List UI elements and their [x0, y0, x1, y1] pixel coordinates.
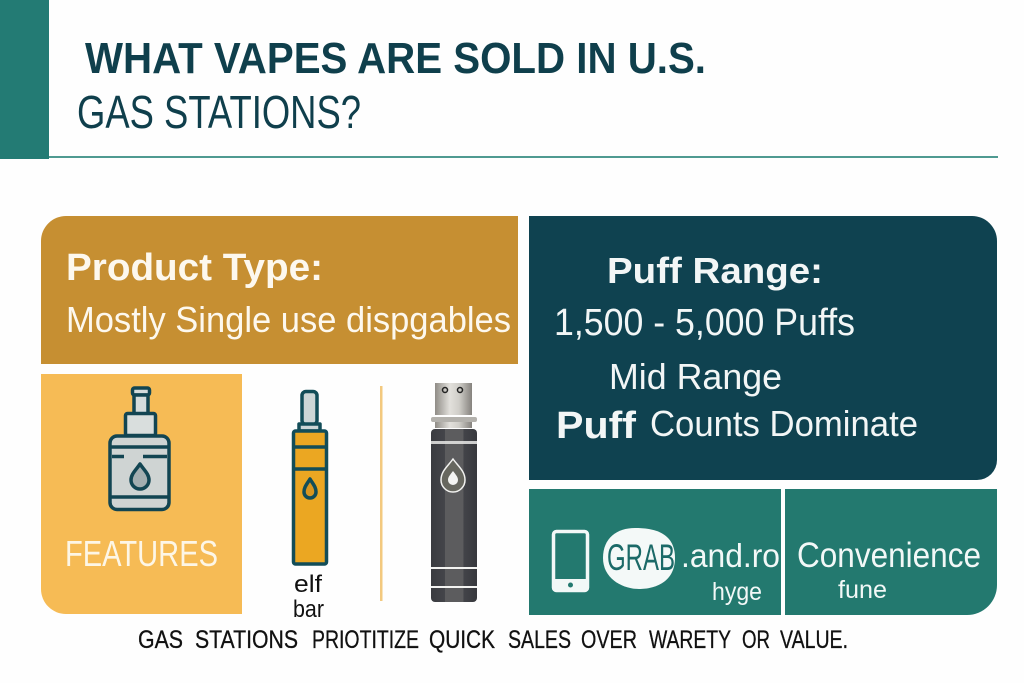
panel: features	[41, 374, 242, 614]
footer caption: WARETY	[649, 626, 731, 654]
product type description: Mostly Single use dispgables	[66, 299, 511, 340]
footer caption	[138, 626, 848, 654]
footer caption: VALUE.	[780, 626, 848, 654]
title line one: WHAT VAPES ARE SOLD IN U.S.	[85, 34, 706, 83]
icon: phone	[553, 532, 588, 591]
hyge label: hyge	[712, 578, 762, 606]
product type heading: Product Type:	[66, 247, 323, 289]
divider	[380, 386, 382, 601]
icon: dark vape pen	[431, 383, 477, 602]
puff counts label: Counts Dominate	[650, 403, 918, 444]
puff counts label: Puff	[556, 405, 636, 447]
footer caption: QUICK	[429, 626, 495, 654]
header accent bar	[0, 0, 49, 159]
footer caption: PRIOTITIZE	[312, 626, 419, 654]
footer caption: STATIONS	[195, 626, 298, 654]
panel: puff range	[529, 216, 997, 480]
panel: convenience	[785, 489, 997, 615]
grab and go text: .and.ro	[681, 537, 780, 574]
header rule	[49, 156, 998, 158]
elf bar label	[293, 571, 324, 623]
footer caption: OR	[742, 626, 770, 654]
mid range label: Mid Range	[609, 356, 782, 397]
title	[77, 34, 706, 138]
icon: bottle	[110, 388, 169, 510]
panel: grab and go	[529, 489, 781, 615]
grab badge: GRAB	[607, 537, 675, 578]
puff counts label	[556, 403, 918, 447]
footer caption: GAS	[138, 626, 183, 654]
puff range heading: Puff Range:	[607, 250, 823, 291]
icon: elf bar pen	[293, 392, 327, 564]
panel: product type	[41, 216, 518, 364]
title line two: GAS STATIONS?	[77, 86, 361, 138]
elf bar label: bar	[293, 596, 324, 623]
fune label: fune	[838, 576, 887, 604]
convenience label: Convenience	[797, 536, 981, 575]
features label: FEATURES	[65, 533, 218, 574]
elf bar label: elf	[294, 571, 322, 598]
puff range value: 1,500 - 5,000 Puffs	[554, 302, 855, 344]
footer caption: SALES	[508, 626, 571, 654]
grab badge	[603, 528, 675, 589]
footer caption: OVER	[581, 626, 637, 654]
